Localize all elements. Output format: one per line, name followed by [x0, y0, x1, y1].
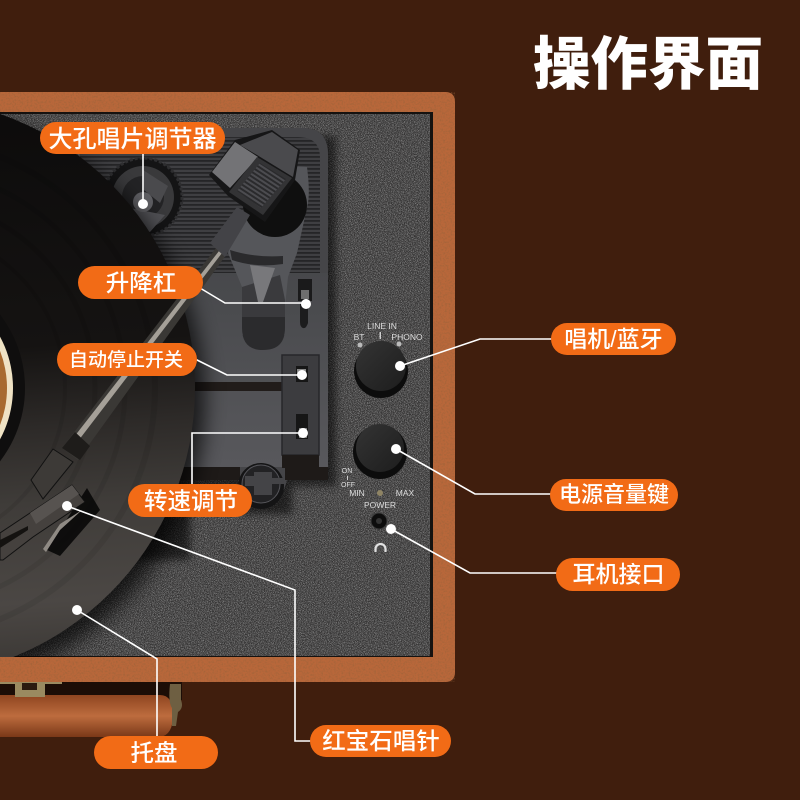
- printed labels: MAX: [396, 488, 415, 498]
- lift arc: [230, 250, 283, 265]
- smooth lower area: [186, 330, 328, 467]
- printed labels: MIN: [349, 488, 365, 498]
- callout: lift lever: [78, 266, 311, 309]
- callout: power and volume: [391, 444, 678, 511]
- tonearm rest and lift: [228, 165, 312, 350]
- callout: phono / bluetooth: 唱机/蓝牙: [564, 326, 663, 352]
- record: [0, 98, 205, 690]
- callout: headphone jack: 耳机接口: [572, 561, 664, 587]
- plate shadow: [139, 132, 341, 564]
- callout: platter: [72, 605, 218, 769]
- callout: auto stop switch: 自动停止开关: [69, 349, 183, 371]
- printed labels: PHONO: [391, 332, 423, 342]
- callout: platter: 托盘: [130, 740, 178, 766]
- lift lever: [298, 279, 312, 328]
- callout: power and volume: 电源音量键: [559, 482, 669, 507]
- tonearm lock at plate bottom: [238, 463, 284, 509]
- callout: speed adjustment: 转速调节: [144, 488, 238, 514]
- base teardrop: [228, 165, 309, 335]
- lift pointer: [250, 265, 275, 302]
- input selector knob: [354, 341, 408, 398]
- tonearm head: [209, 130, 300, 257]
- callout: auto stop switch: [57, 343, 307, 380]
- pivot disc: [243, 173, 307, 237]
- callout: phono / bluetooth: [395, 323, 676, 371]
- callout: large-hole record adapter: [40, 122, 225, 209]
- lift dome: [242, 317, 285, 350]
- printed labels: [341, 321, 423, 510]
- callout: lift lever: 升降杠: [106, 270, 176, 296]
- tonearm tube: [62, 248, 226, 460]
- printed labels: POWER: [364, 500, 396, 510]
- folded lid and hinges: [0, 678, 182, 737]
- volume knob: [353, 424, 407, 479]
- spindle adapter knob: [104, 158, 182, 236]
- power, input and headphone controls: [341, 321, 423, 552]
- callout: large-hole record adapter: 大孔唱片调节器: [48, 126, 216, 153]
- printed labels: BT: [354, 332, 364, 342]
- headphone icon: [376, 544, 386, 552]
- callout: headphone jack: [386, 524, 680, 591]
- callout: speed adjustment: [128, 428, 308, 517]
- callout: ruby stylus: [62, 501, 451, 757]
- tonearm plate: [80, 128, 336, 560]
- headphone jack: [371, 513, 387, 529]
- callout: ruby stylus: 红宝石唱针: [322, 728, 440, 754]
- plate body: [222, 128, 328, 490]
- speed and auto-stop switch panel: [282, 355, 319, 468]
- cartridge and headshell: [0, 449, 100, 560]
- lift body: [242, 275, 285, 318]
- turntable case: leather frame: [0, 92, 455, 682]
- printed labels: OFF: [341, 482, 355, 489]
- printed labels: LINE IN: [367, 321, 397, 331]
- title: 操作界面: [533, 33, 763, 97]
- ribbed top area: [80, 137, 320, 273]
- speckled control deck: [0, 114, 430, 656]
- printed labels: ON: [342, 468, 352, 475]
